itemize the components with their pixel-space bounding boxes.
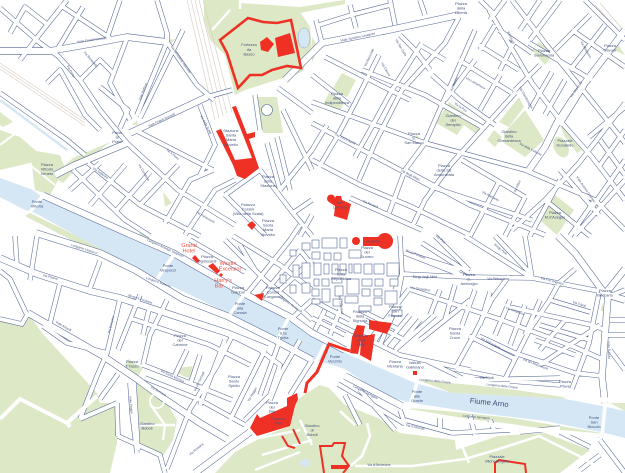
place labels: Savonarola bbox=[534, 53, 555, 58]
green: Indipendenza bbox=[322, 73, 356, 115]
place labels: Ponte bbox=[278, 326, 288, 331]
place labels: del bbox=[177, 338, 183, 343]
hotel labels: Westin bbox=[220, 261, 236, 267]
place labels: San bbox=[590, 420, 598, 425]
place labels: Piazza bbox=[266, 400, 278, 405]
place labels: Piazza bbox=[559, 379, 571, 384]
green: San Marco and small squares bbox=[312, 37, 610, 311]
place labels: Piazza bbox=[389, 359, 401, 364]
place labels: Trinita bbox=[278, 335, 289, 340]
small pond Boboli bbox=[300, 459, 310, 467]
place labels: Piazza bbox=[262, 218, 274, 223]
place labels: Piazza bbox=[126, 359, 138, 364]
place labels: Vittorio bbox=[41, 167, 54, 172]
place labels: Galileiano bbox=[406, 365, 425, 370]
green: Gherardesca bbox=[487, 97, 544, 157]
street labels: Via Nazionale bbox=[363, 48, 375, 67]
place labels: Carmine bbox=[172, 342, 188, 347]
place labels: Annunziata bbox=[434, 172, 455, 177]
street labels: Lungarno Vespucci bbox=[71, 243, 98, 255]
place labels: Piazzale bbox=[557, 138, 573, 143]
place labels: degli bbox=[357, 338, 365, 343]
green: Azeglio bbox=[537, 195, 574, 235]
street labels: Lungarno Amerigo Vespucci bbox=[147, 238, 185, 258]
landmark: Duomo bbox=[352, 233, 393, 249]
place labels: Palazzo bbox=[266, 285, 280, 290]
street labels: Via Santa Monaca bbox=[160, 369, 185, 383]
green: Porta al Prato wedges bbox=[53, 39, 175, 207]
place labels: Piazza bbox=[262, 174, 274, 179]
street labels: Viale Aleardi bbox=[55, 320, 72, 332]
place labels: Maria bbox=[263, 227, 274, 232]
place labels: al bbox=[115, 135, 119, 140]
place labels: Ognissanti bbox=[198, 259, 217, 264]
place labels: San bbox=[391, 309, 399, 314]
green: west hill bbox=[0, 316, 117, 473]
place labels: S.ta bbox=[279, 331, 287, 336]
street labels: Viale Poggio bbox=[128, 396, 134, 414]
place labels: Goldoni bbox=[231, 290, 245, 295]
landmark: Fortezza da Basso bbox=[220, 18, 301, 88]
place labels: S. bbox=[467, 277, 471, 282]
green: Boboli west bbox=[137, 380, 177, 456]
place labels: Santa bbox=[226, 133, 237, 138]
place labels: della SS bbox=[437, 168, 452, 173]
place labels: Palazzo bbox=[271, 416, 285, 421]
street labels: Via dei Malcontenti bbox=[522, 357, 549, 371]
railway lines bbox=[0, 0, 625, 126]
green: Tasso and Carmine bbox=[123, 359, 193, 379]
street labels: Lungarno Serristori bbox=[462, 414, 490, 420]
place labels: Mentana bbox=[387, 364, 404, 369]
street labels: Viale Belfiore bbox=[138, 82, 149, 101]
place labels: Porta bbox=[112, 130, 122, 135]
green: Giardino dei Semplici bbox=[436, 102, 484, 135]
place labels: della bbox=[337, 272, 346, 277]
place labels: Croce bbox=[450, 335, 461, 340]
place labels: Novella bbox=[224, 142, 238, 147]
street labels: Via Fra' Angelico bbox=[540, 276, 564, 286]
place labels: Piazza bbox=[41, 162, 53, 167]
place labels: Giardino bbox=[139, 421, 155, 426]
landmark: Santa Maria Novella bbox=[247, 221, 256, 230]
green: station gardens bbox=[255, 97, 283, 133]
place labels: (Villa della Scala) bbox=[233, 211, 264, 216]
street labels: Via Masaccio bbox=[569, 80, 583, 98]
place labels: alle bbox=[414, 394, 421, 399]
place labels: Prato bbox=[112, 139, 123, 144]
place labels: Ponte bbox=[330, 354, 340, 359]
landmark: Harry's Bar bbox=[219, 273, 223, 277]
landmark: Galleria degli Uffizi bbox=[350, 325, 375, 361]
place labels: Piazza bbox=[538, 48, 550, 53]
street labels: Via Calzaiuoli bbox=[337, 295, 345, 315]
street labels: Via Alfani bbox=[512, 179, 522, 193]
street labels: Via Romana bbox=[188, 442, 205, 456]
place labels: Ponte bbox=[32, 199, 42, 204]
landmark: Corridoio Vasariano bbox=[305, 344, 350, 393]
landmark: San Lorenzo bbox=[327, 195, 351, 220]
green: NE square bbox=[610, 40, 625, 55]
place labels: Novella bbox=[261, 232, 275, 237]
place labels: dei bbox=[269, 405, 275, 410]
hotel labels: Grand bbox=[181, 243, 197, 249]
place labels: San Marco bbox=[404, 140, 424, 145]
landmark: Westin Excelsior bbox=[208, 263, 220, 274]
street labels: Borgo Pinti bbox=[493, 243, 508, 256]
street labels: Via Palazzuolo bbox=[195, 210, 216, 224]
street labels: Via Alamanni bbox=[481, 190, 500, 202]
place labels: Veneto bbox=[41, 171, 54, 176]
street labels: Via Bronzino bbox=[107, 315, 115, 334]
place labels: Santo bbox=[229, 379, 240, 384]
place labels: della bbox=[505, 134, 514, 139]
street labels: Via Solferino bbox=[92, 166, 109, 180]
place labels: Giardino bbox=[445, 113, 461, 118]
place labels: Pitti bbox=[269, 409, 275, 414]
place labels: Giardino bbox=[501, 129, 517, 134]
place labels: della bbox=[356, 314, 365, 319]
landmark: Palazzo Vecchio bbox=[369, 320, 392, 334]
street labels: Via Lamarmora bbox=[465, 76, 486, 90]
place labels: Piazza bbox=[361, 245, 373, 250]
landmark: Istituto Galileo bbox=[413, 371, 417, 375]
place labels: Piazza bbox=[449, 326, 461, 331]
lake in Fortezza gardens bbox=[298, 28, 310, 48]
place labels: di bbox=[310, 428, 314, 433]
street labels: Via la Pira bbox=[453, 101, 468, 113]
place labels: M.d'Azeglio bbox=[545, 215, 566, 220]
place labels: Palazzo bbox=[241, 202, 255, 207]
street labels: Via Tripoli bbox=[572, 300, 587, 308]
street labels: Via Malcontenti bbox=[480, 336, 501, 350]
canal Mugnone bbox=[0, 100, 67, 150]
place labels: Repubblica bbox=[331, 276, 352, 281]
place labels: Ponte bbox=[589, 415, 599, 420]
street labels: Via Pinti bbox=[435, 234, 447, 245]
street labels: Via Ricasoli bbox=[362, 199, 379, 209]
street labels: Viale Antonio Gramsci bbox=[575, 175, 597, 204]
place labels: Libertà bbox=[455, 10, 468, 15]
place labels: Stazione bbox=[223, 128, 239, 133]
street labels: Via Maggio bbox=[246, 386, 258, 402]
place labels: Piazza bbox=[438, 163, 450, 168]
place labels: Michelangelo bbox=[485, 459, 510, 464]
street labels: Via Ponte bbox=[66, 65, 76, 79]
green: south hills bbox=[215, 385, 590, 473]
hotel labels bbox=[181, 243, 241, 290]
place labels: Corsini bbox=[267, 290, 279, 295]
landmark: Grand Hotel bbox=[192, 255, 200, 263]
green: Fortezza gardens bbox=[204, 0, 312, 95]
place labels: Palazzo bbox=[353, 309, 367, 314]
place labels: Boboli bbox=[306, 432, 318, 437]
street labels: Via Pietrapiana bbox=[487, 277, 509, 281]
historic centre blocks bbox=[280, 238, 402, 316]
place labels: Ponte bbox=[163, 263, 173, 268]
street labels: Via Benedetto Marcello bbox=[170, 45, 192, 74]
hotel labels: Excelsior bbox=[219, 267, 241, 273]
place labels: Firenze bbox=[388, 313, 402, 318]
place labels: Signoria bbox=[353, 318, 368, 323]
place labels: Piazza bbox=[389, 304, 401, 309]
roundabout near station bbox=[262, 104, 272, 116]
street labels: Via Tripoli bbox=[480, 376, 494, 380]
place labels: alla bbox=[237, 306, 244, 311]
place labels: Maria bbox=[226, 137, 237, 142]
place labels: Piazza bbox=[604, 43, 616, 48]
place labels: Cavour bbox=[604, 48, 617, 53]
place labels: Fortezza bbox=[241, 42, 257, 47]
street labels: Lungarno della Grazie bbox=[419, 377, 451, 385]
street labels: Via San Gallo bbox=[394, 38, 408, 57]
street labels: Via Ghibellina bbox=[410, 286, 430, 292]
place labels: della bbox=[333, 96, 342, 101]
place labels: Uffizi bbox=[357, 342, 366, 347]
place labels: Boboli bbox=[141, 426, 153, 431]
street labels: Via Pisana bbox=[42, 273, 58, 281]
street labels: Via Cavour bbox=[380, 62, 392, 78]
place labels: Ponte bbox=[412, 389, 422, 394]
place labels: Santa bbox=[263, 223, 274, 228]
street labels: Via Romana bbox=[150, 385, 167, 397]
hotel labels: Hotel bbox=[182, 249, 196, 255]
green: Donatello bbox=[550, 134, 572, 160]
street labels: Via degli Alfani bbox=[400, 168, 421, 182]
place labels: Lorenzo bbox=[333, 205, 348, 210]
place labels: Donatello bbox=[557, 143, 574, 148]
street labels: Viale Spartaco Lavagnini bbox=[340, 31, 376, 43]
place labels: Piazza bbox=[232, 285, 244, 290]
place labels: Piazza bbox=[174, 333, 186, 338]
place labels: Giardino bbox=[304, 423, 320, 428]
place labels: Piave bbox=[560, 384, 571, 389]
place labels: Ponte bbox=[235, 301, 245, 306]
street labels: Viale G.Italia bbox=[607, 341, 611, 359]
place labels: San bbox=[336, 200, 344, 205]
place labels: Duomo bbox=[367, 238, 380, 244]
place labels: S. bbox=[412, 136, 416, 141]
place labels: della bbox=[264, 179, 273, 184]
hotel labels: Bar bbox=[215, 284, 223, 290]
place labels: Indipendenza bbox=[325, 100, 350, 105]
place labels: Piazza bbox=[463, 272, 475, 277]
place labels: del bbox=[364, 250, 370, 255]
place labels: Piazza bbox=[599, 288, 611, 293]
place labels: Vespucci bbox=[160, 268, 176, 273]
place labels: Piazza bbox=[201, 254, 213, 259]
street labels: Via Benedetto bbox=[83, 50, 99, 68]
landmark: San Miniato bbox=[495, 460, 526, 473]
street labels: Lungarno delle Grazie bbox=[486, 382, 518, 390]
street labels: Via Micheli bbox=[449, 77, 459, 92]
landmark: Palazzo Corsini bbox=[254, 293, 264, 301]
river Arno bbox=[0, 178, 625, 438]
street labels: Via Masaccio bbox=[579, 40, 592, 59]
street labels: Via Il Prato bbox=[165, 148, 180, 161]
place labels: della bbox=[457, 6, 466, 11]
green: Cascine bbox=[0, 112, 65, 195]
place labels: da bbox=[247, 47, 252, 52]
street labels: Via Giambologna bbox=[518, 86, 534, 109]
place labels: T.Tasso bbox=[125, 364, 140, 369]
place labels: Vittoria bbox=[31, 204, 44, 209]
place labels: Piazza bbox=[549, 210, 561, 215]
place labels: Duomo bbox=[361, 254, 374, 259]
street labels: Lungarno Acciaiuoli bbox=[278, 295, 303, 314]
place labels: Corsini bbox=[242, 207, 254, 212]
place labels: Pitti bbox=[275, 421, 281, 426]
place labels: Piazza bbox=[331, 91, 343, 96]
green: Savonarola bbox=[532, 42, 554, 65]
street labels: Via Curtatone bbox=[137, 163, 151, 182]
place labels: Grazie bbox=[411, 398, 424, 403]
place labels: Istituto bbox=[409, 360, 421, 365]
green: river banks bbox=[25, 213, 625, 438]
place labels: Stazione bbox=[260, 183, 277, 188]
place labels: (Lungarno) bbox=[263, 294, 283, 299]
street labels: Borgo S.Frediano bbox=[128, 293, 153, 305]
street labels: Via dell'Oriuolo bbox=[405, 248, 426, 260]
place labels: Gherardesca bbox=[497, 138, 521, 143]
landmark: Palazzo Pitti bbox=[250, 393, 300, 448]
street labels: Borgo degli Albizi bbox=[413, 275, 438, 279]
street labels: Via S.Niccolò bbox=[406, 423, 425, 431]
place labels: Beccaria bbox=[597, 293, 614, 298]
place labels: Semplici bbox=[445, 122, 461, 127]
place labels: Galleria bbox=[354, 333, 368, 338]
place labels: Niccolò bbox=[587, 424, 601, 429]
street labels: Via di Belvedere bbox=[367, 463, 391, 467]
river label: Fiume Arno bbox=[469, 396, 509, 409]
street labels: Via della Scala bbox=[199, 114, 213, 135]
street labels: Via dei Serragli bbox=[193, 371, 206, 392]
street labels: Via Giusti bbox=[506, 31, 516, 45]
place labels: Piazzale bbox=[489, 454, 505, 459]
place labels: Basso bbox=[243, 52, 255, 57]
place labels: Piazza bbox=[228, 374, 240, 379]
place labels: dei bbox=[450, 118, 456, 123]
green: north strip bbox=[240, 0, 345, 13]
street labels: Viale Fratelli Rosselli bbox=[77, 36, 107, 44]
place labels: Spirito bbox=[228, 383, 240, 388]
landmark: Forte Belvedere bbox=[320, 443, 349, 473]
street labels: Lungarno Soderini bbox=[145, 276, 172, 288]
landmark: Stazione Santa Maria Novella bbox=[216, 106, 259, 179]
hotel labels: Harry's bbox=[214, 278, 232, 284]
circular path Boboli bbox=[150, 394, 164, 408]
place labels: Piazza bbox=[408, 131, 420, 136]
place labels: Piazza bbox=[335, 267, 347, 272]
place labels: Piazza bbox=[455, 1, 467, 6]
street labels: Via XXVII Aprile bbox=[334, 133, 357, 146]
place labels: Ambrogio bbox=[460, 281, 478, 286]
street labels: Viale Fratelli Rosselli bbox=[147, 112, 176, 128]
street labels: Via della Colonna bbox=[519, 141, 543, 157]
street labels: Via Ghibellina bbox=[505, 306, 525, 316]
place labels: Santa bbox=[450, 331, 461, 336]
place labels: Carraia bbox=[233, 310, 247, 315]
place labels: Vecchio bbox=[328, 359, 343, 364]
street labels: Lungarno Torrigiani bbox=[353, 384, 379, 400]
